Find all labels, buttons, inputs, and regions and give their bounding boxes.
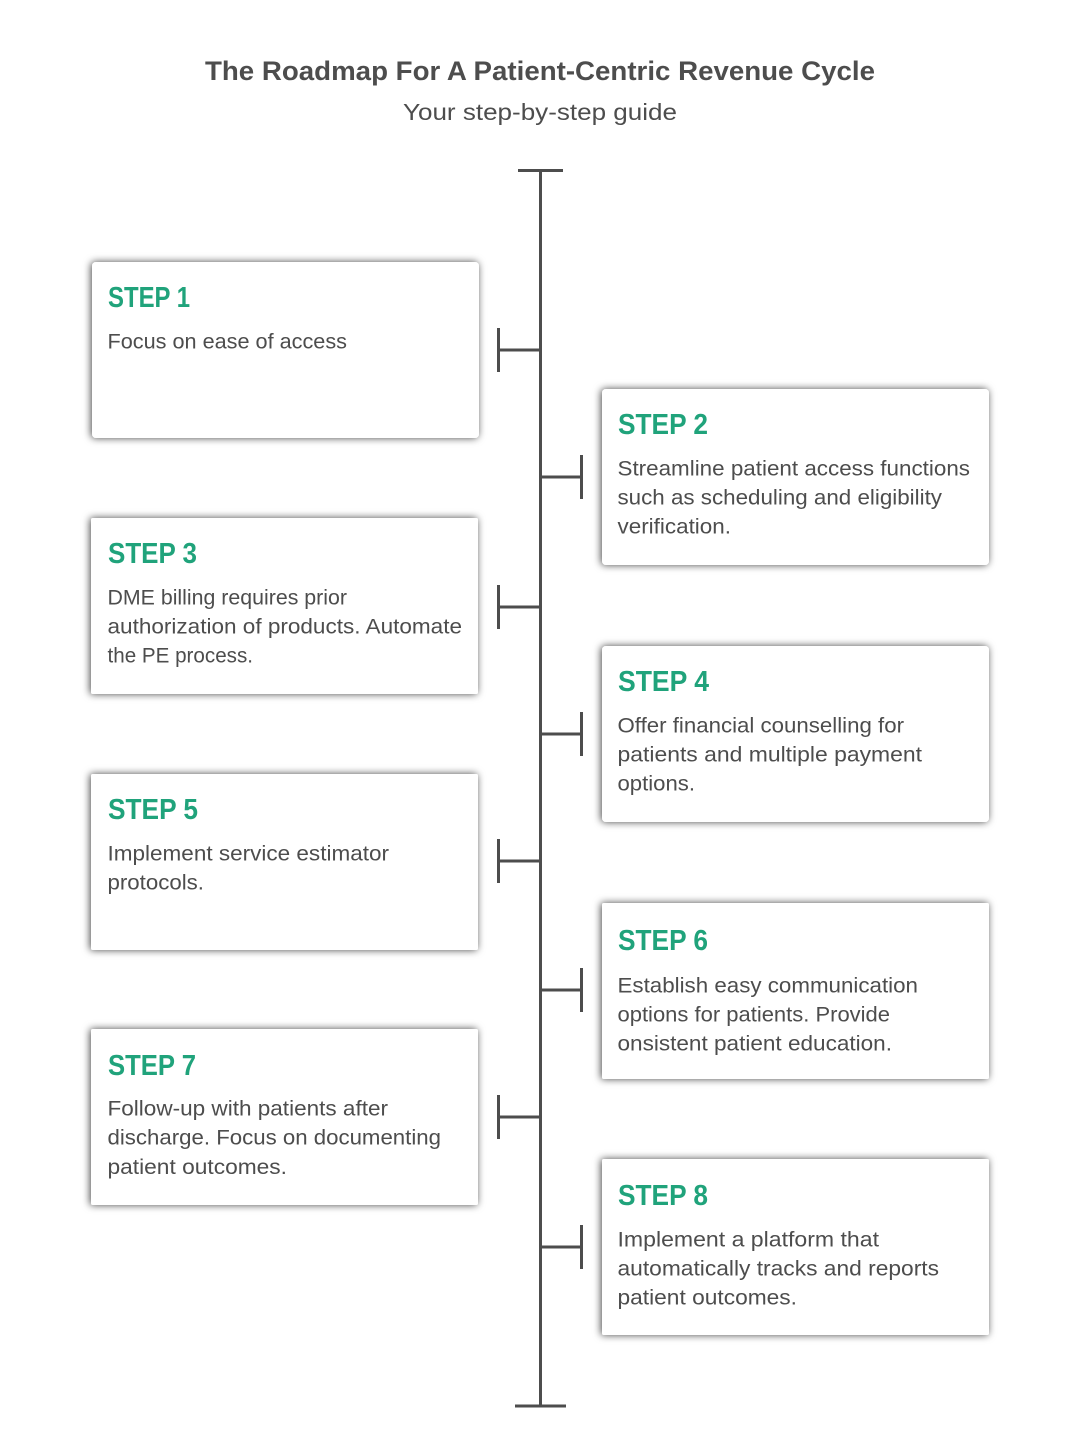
- panel: step 2: such as scheduling and eligibility: [618, 486, 942, 510]
- panel: step 3: the PE process.: [108, 644, 253, 668]
- connector: step 3: [498, 585, 540, 629]
- panel: step 8: STEP 8: [618, 1180, 708, 1212]
- panel: step 3: DME billing requires prior: [108, 586, 347, 610]
- timeline axis: [515, 170, 566, 1406]
- panel: step 1: [92, 262, 479, 438]
- connector: step 5: [498, 839, 540, 883]
- panel: step 7: discharge. Focus on documenting: [108, 1126, 441, 1150]
- panel: step 5: protocols.: [108, 870, 204, 894]
- panel: step 8: automatically tracks and reports: [618, 1256, 939, 1280]
- panel: step 8: Implement a platform that: [618, 1228, 879, 1252]
- panel: step 8: [602, 1159, 989, 1335]
- connector: step 7: [498, 1095, 540, 1139]
- panel: step 5: Implement service estimator: [108, 842, 389, 866]
- panel: step 6: options for patients. Provide: [618, 1002, 890, 1026]
- connector: step 6: [541, 968, 582, 1012]
- panel: step 1: STEP 1: [108, 282, 190, 314]
- connector: step 2: [541, 455, 582, 499]
- panel: step 3: STEP 3: [108, 538, 197, 570]
- panel: step 6: STEP 6: [618, 925, 708, 957]
- panel: step 4: [602, 646, 989, 822]
- panel: step 3: authorization of products. Automate: [108, 614, 462, 638]
- title: The Roadmap For A Patient-Centric Revenue Cycle: [205, 56, 875, 86]
- panel: step 2: Streamline patient access functions: [618, 456, 970, 480]
- panel: step 3: [91, 518, 478, 694]
- panel: step 4: patients and multiple payment: [618, 742, 922, 766]
- panel: step 4: Offer financial counselling for: [618, 714, 904, 738]
- panel: step 2: [602, 389, 989, 565]
- panel: step 4: STEP 4: [618, 666, 709, 698]
- panel: step 2: verification.: [618, 514, 731, 538]
- panel: step 4: options.: [618, 772, 695, 796]
- panel: step 8: patient outcomes.: [618, 1286, 797, 1310]
- panel: step 6: [602, 903, 989, 1079]
- panel: step 7: Follow-up with patients after: [108, 1096, 388, 1120]
- subtitle: Your step-by-step guide: [403, 99, 677, 125]
- panel: step 6: onsistent patient education.: [618, 1032, 892, 1056]
- connector: step 1: [498, 328, 540, 372]
- connector: step 4: [541, 712, 582, 756]
- connector: step 8: [541, 1225, 582, 1269]
- panel: step 5: STEP 5: [108, 794, 198, 826]
- panel: step 7: patient outcomes.: [108, 1155, 287, 1179]
- panel: step 2: STEP 2: [618, 409, 708, 441]
- panel: step 7: STEP 7: [108, 1050, 196, 1082]
- panel: step 5: [91, 774, 478, 950]
- panel: step 6: Establish easy communication: [618, 974, 918, 998]
- panel: step 1: Focus on ease of access: [108, 330, 347, 354]
- panel: step 7: [91, 1029, 478, 1205]
